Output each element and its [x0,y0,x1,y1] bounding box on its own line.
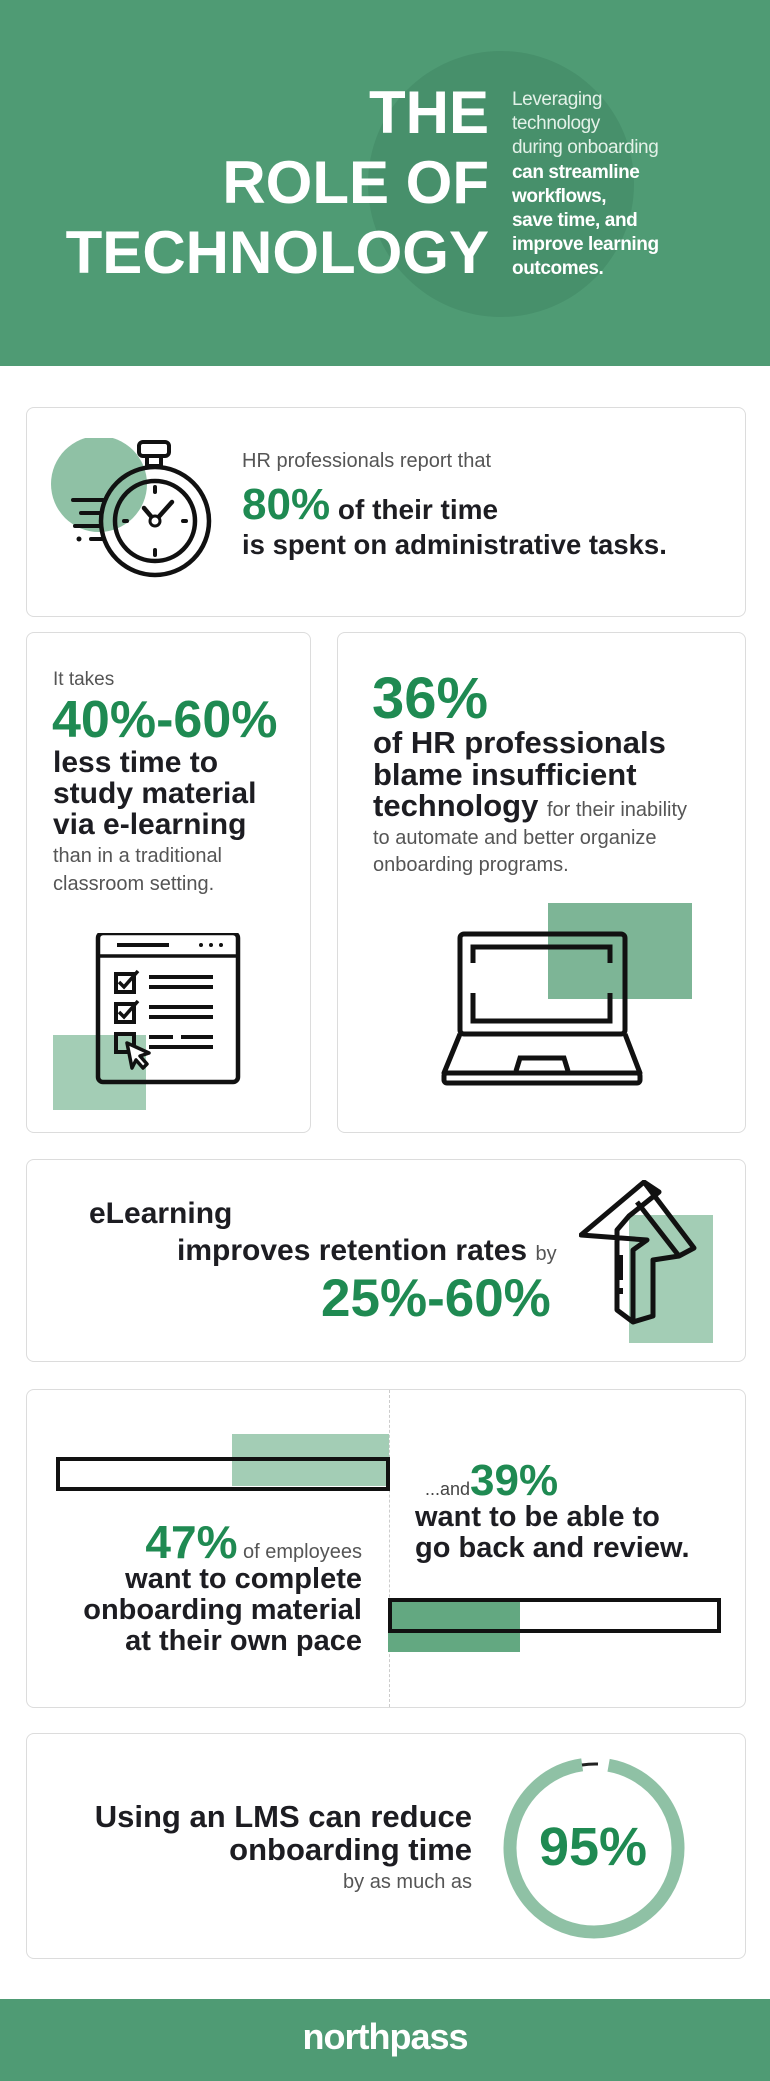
logo: northpass: northpass [302,2016,468,2057]
stat: 47%: 47% of employees [145,1516,362,1568]
text: administrative tasks: is spent on administrative tasks. [242,529,667,560]
intro text: can streamline [512,162,639,183]
stat: 80%: 80% of their time [242,480,498,529]
panel: self-paced [26,1389,746,1708]
footer [0,1999,770,2081]
title: TECHNOLOGY [66,219,489,286]
text: complete at own pace [83,1563,362,1657]
icon: stopwatch [51,438,212,578]
text: less time to study: via e-learning [53,808,246,841]
divider dashed [389,1390,390,1707]
icon: up arrow [579,1180,713,1343]
text: complete at own pace: at their own pace [125,1625,362,1657]
text: of HR professionals blame [373,725,687,823]
text: eLearning: eLearning [89,1197,232,1230]
title [66,79,489,286]
intro text: technology [512,113,600,134]
title: THE [369,79,489,146]
panel: e-learning time [26,632,311,1133]
text: automate: onboarding programs. [373,854,569,876]
text: than traditional [53,845,222,895]
panel: insufficient technology [337,632,746,1133]
text: want to review: want to be able to [415,1501,660,1533]
stat: 40%-60%: 40%-60% [52,691,277,749]
icon: laptop [442,903,692,1086]
panel: HR admin time [26,407,746,617]
text: of HR professionals blame: of HR professionals [373,725,666,760]
header banner [0,0,770,366]
text: automate [373,827,657,876]
text: less time to study: less time to [53,746,218,779]
text: automate: to automate and better organize [373,827,657,849]
intro text: workflows, [512,186,606,207]
intro text: during onboarding [512,137,658,158]
text: complete at own pace: onboarding material [83,1594,362,1626]
stat: 36%: 36% [372,666,488,731]
text: complete at own pace: want to complete [125,1563,362,1595]
text: want to review [414,1501,690,1564]
intro text: outcomes. [512,258,603,279]
icon: checklist window [53,933,240,1110]
title: ROLE OF [222,149,489,216]
bar chart: 39% [388,1598,721,1652]
panel: LMS [26,1733,746,1959]
text: It takes: It takes [53,669,114,690]
stat: 39%: ...and39% [425,1456,558,1505]
intro text: Leveraging [512,89,602,110]
text: than traditional: classroom setting. [53,873,214,895]
text: Using an LMS [95,1799,472,1867]
panel: retention [26,1159,746,1362]
intro text [512,89,659,279]
text: Using an LMS: Using an LMS can reduce [95,1799,472,1834]
text: want to review: go back and review. [415,1532,690,1564]
intro text: save time, and [512,210,637,231]
text: less time to study [53,746,256,841]
text: improves retention rates: improves retention rates by [177,1234,557,1267]
text: Using an LMS: onboarding time [229,1832,472,1867]
bar chart: 47% [56,1434,390,1491]
text: of HR professionals blame: blame insufficient [373,756,637,792]
text: of HR professionals blame: technology for their inability [373,788,687,823]
text: less time to study: study material [53,777,256,810]
text: by as much as: by as much as [343,1871,472,1893]
chart: 95% ring [504,1758,684,1938]
header circle decoration [368,51,634,317]
intro text: improve learning [512,234,659,255]
stat: 95%: 95% [539,1817,647,1877]
stat: 25%-60%: 25%-60% [321,1269,551,1328]
text: than traditional: than in a traditional [53,845,222,867]
text: HR professionals report: HR professionals report that [242,450,491,472]
